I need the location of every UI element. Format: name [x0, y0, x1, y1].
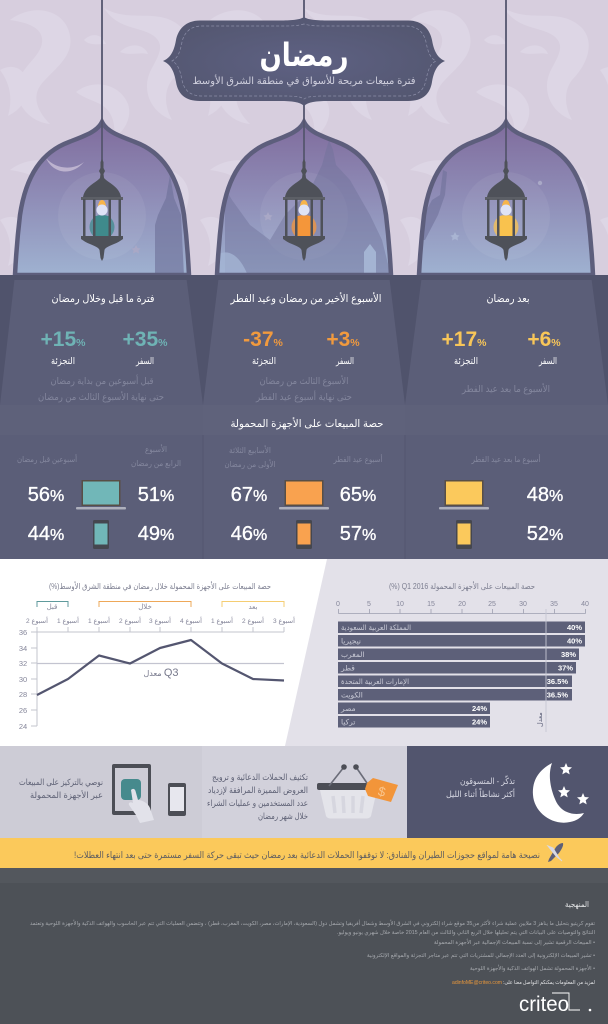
line chart: mobile share during Ramadan — [19, 581, 295, 731]
stats section background — [0, 275, 608, 560]
device share percentages: 48% — [527, 484, 563, 506]
callout: tip for travel sites — [0, 838, 608, 868]
column headings: الأسبوع الأخير من رمضان وعيد الفطر — [230, 292, 382, 305]
value labels: 24% — [472, 704, 487, 713]
axis labels: 15 — [427, 601, 435, 608]
icon: phone yellow — [456, 520, 472, 549]
country labels: مصر — [340, 704, 356, 713]
stats: pre and during Ramadan: السفر — [135, 356, 154, 367]
arch: last week of Ramadan and Eid scene — [217, 120, 391, 276]
text: العروض المميزة المرافقة لإزدياد — [208, 785, 308, 796]
lantern: yellow — [485, 159, 527, 261]
axis labels: 30 — [519, 601, 527, 608]
average line — [545, 609, 547, 732]
column headings: بعد رمضان — [486, 293, 530, 305]
text — [19, 777, 103, 800]
device share percentages: 67% — [231, 484, 267, 506]
stats: pre and during Ramadan: التجزئة — [51, 356, 75, 367]
week labels: أسبوع 1 — [211, 616, 233, 625]
bar chart axis — [338, 609, 586, 614]
week labels: أسبوع 2 — [119, 616, 141, 625]
data line — [37, 640, 284, 695]
stats: last week and Eid: +3% — [326, 328, 360, 351]
value labels: 24% — [472, 718, 487, 726]
stats: last week and Eid: -37% — [243, 328, 284, 351]
lantern: teal — [81, 159, 123, 261]
lantern cords — [102, 0, 506, 162]
period labels: أسبوع عيد الفطر — [333, 454, 382, 464]
text: تذكّر - المتسوقون — [460, 775, 516, 786]
week labels: أسبوع 3 — [149, 616, 171, 625]
bracket labels — [47, 604, 258, 611]
methodology text — [30, 919, 595, 972]
device share percentages: 65% — [340, 484, 376, 506]
icon: shopping basket with price tag — [317, 764, 398, 818]
period labels: الرابع من رمضان — [131, 459, 181, 468]
week labels: أسبوع 1 — [57, 616, 79, 625]
bracket labels: قبل — [47, 604, 57, 611]
value labels: 38% — [561, 650, 576, 659]
stats: pre and during Ramadan: حتى نهاية الأسبوع الثالث من رمضان — [38, 391, 164, 403]
methodology heading: المنهجية — [565, 900, 589, 909]
column headings: فترة ما قبل وخلال رمضان — [52, 293, 154, 305]
period labels: الأولى من رمضان — [224, 459, 276, 469]
bars — [338, 622, 585, 728]
device share percentages: 44% — [28, 523, 64, 545]
country labels — [340, 623, 411, 726]
period labels: أسبوعين قبل رمضان — [17, 454, 77, 464]
title banner — [163, 17, 445, 106]
text — [207, 772, 309, 821]
Q3 average line — [37, 662, 284, 664]
arch: after Ramadan scene — [419, 120, 593, 276]
country labels: المغرب — [341, 650, 365, 659]
header background with arabesque pattern — [0, 0, 608, 276]
week labels: أسبوع 4 — [180, 616, 202, 625]
device share percentages: 51% — [138, 484, 174, 506]
y axis labels: 32 — [19, 659, 27, 668]
text — [446, 775, 516, 799]
methodology text: • تشير المبيعات الإلكترونية إلى العدد الإجمالي للمشتريات التي تتم عبر متاجر التجزئة والمواقع الإلكترونية — [367, 952, 595, 959]
stats: pre and during Ramadan — [38, 328, 168, 403]
bar chart title: حصة المبيعات على الأجهزة المحمولة Q1 2016 (%) — [389, 581, 535, 591]
device share percentages: 46% — [231, 523, 267, 545]
country labels: تركيا — [341, 718, 355, 726]
icon: phone orange — [296, 520, 312, 549]
arch: pre and during Ramadan scene — [15, 120, 189, 276]
text: تكثيف الحملات الدعائية و ترويج — [212, 772, 309, 782]
callout text: نصيحة هامة لمواقع حجوزات الطيران والفنادق: لا توقفوا الحملات الدعائية بعد رمضان حيث تبقى حركة السفر مستمرة حتى بعد انتهاء العطلات! — [74, 850, 540, 860]
stats: last week and Eid: حتى نهاية أسبوع عيد الفطر — [255, 390, 352, 403]
week labels: أسبوع 1 — [88, 616, 110, 625]
country labels: قطر — [340, 664, 355, 672]
panel: night shoppers — [446, 763, 589, 823]
week labels: أسبوع 2 — [242, 616, 264, 625]
line chart title: حصة المبيعات على الأجهزة المحمولة خلال رمضان في منطقة الشرق الأوسط(%) — [49, 581, 271, 591]
stats: last week and Eid: التجزئة — [252, 356, 276, 367]
period brackets — [37, 602, 284, 607]
device share percentages — [28, 484, 563, 545]
axis labels: 35 — [550, 601, 558, 608]
axis labels: 10 — [396, 601, 404, 608]
text: خلال شهر رمضان — [258, 811, 308, 821]
stats: after Ramadan: +6% — [527, 328, 561, 351]
icon: laptop yellow — [439, 480, 489, 510]
icon: airplane — [548, 843, 563, 862]
heading: رمضان — [260, 37, 348, 74]
value labels: 40% — [567, 636, 582, 646]
icon: shopping basket with price tag: $ — [377, 783, 388, 800]
stats: after Ramadan: السفر — [538, 356, 557, 367]
week labels: أسبوع 3 — [273, 616, 295, 625]
axis labels: 40 — [581, 601, 589, 608]
bracket labels: بعد — [248, 604, 258, 611]
text: نوصي بالتركيز على المبيعات — [19, 777, 103, 787]
y axis labels: 24 — [19, 722, 27, 731]
axis labels: 0 — [336, 601, 340, 608]
stats: pre and during Ramadan: +35% — [123, 328, 168, 351]
y axis labels: 34 — [19, 644, 27, 653]
stats: after Ramadan: الأسبوع ما بعد عيد الفطر — [461, 383, 550, 395]
y axis labels: 28 — [19, 690, 27, 699]
axis labels: 20 — [458, 601, 466, 608]
panel: methodology footer — [0, 868, 608, 1024]
icon: phone teal — [93, 520, 109, 549]
icon: laptop orange — [279, 480, 329, 510]
stats: pre and during Ramadan: +15% — [41, 328, 86, 351]
criteo logo: criteo — [519, 993, 569, 1016]
panel: mobile recommendation — [19, 764, 186, 823]
lantern: orange — [283, 159, 325, 261]
value labels — [472, 623, 582, 726]
methodology text: تقوم كريتيو بتحليل ما يناهز 3 ملايين عملية شراء لأكثر من35 موقع شراء إلكتروني في الشرق الأوسط وشمال أفريقيا وتشمل دول (السعودية، الإمارات، مصر، الكويت، المغرب، قطر) ، وتتضمن العمليات التي تتم عبر الحاسوب والهواتف الذكية والأجهزة اللوحية وتعتمد — [30, 919, 595, 927]
axis labels — [336, 601, 589, 608]
panel: campaigns recommendation — [207, 764, 398, 821]
text: أكثر نشاطاً أثناء الليل — [446, 787, 515, 799]
icon: tablet and phone with hand — [112, 764, 186, 823]
period labels: الأسبوع — [145, 444, 167, 454]
recommendation row background — [0, 746, 608, 838]
y axis labels: 36 — [19, 628, 27, 637]
week labels — [26, 616, 295, 625]
country labels: الكويت — [341, 690, 363, 700]
axes — [31, 627, 284, 726]
axis labels: 5 — [367, 601, 371, 608]
axis labels: 25 — [488, 601, 496, 608]
week labels: أسبوع 2 — [26, 616, 48, 625]
charts background — [0, 559, 608, 746]
period labels: الأسابيع الثلاثة — [229, 445, 271, 455]
contact line: لمزيد من المعلومات يمكنكم التواصل معنا على: — [503, 979, 595, 986]
stats: after Ramadan — [442, 328, 561, 395]
y axis labels: 26 — [19, 706, 27, 715]
device share percentages: 52% — [527, 523, 563, 545]
methodology text: • المبيعات الرقمية تشير إلى نسبة المبيعات الإجمالية عبر الأجهزة المحمولة — [434, 938, 595, 946]
icon: crescent moon and stars — [533, 763, 589, 823]
stats: after Ramadan: +17% — [442, 328, 487, 351]
Q3 average label: Q3 معدل — [143, 667, 179, 679]
contact line — [452, 979, 595, 986]
subheading: فترة مبيعات مربحة للأسواق في منطقة الشرق الأوسط — [192, 74, 416, 87]
text: عدد المستخدمين و عمليات الشراء — [207, 798, 308, 808]
methodology text: النتائج والتوصيات على البيانات التي يتم تحليلها خلال الربع الثاني والثالث من العام 2015 خاصة خلال شهري يونيو ويوليو. — [337, 930, 595, 936]
methodology text: • الأجهزة المحمولة تشمل الهواتف الذكية والأجهزة اللوحية — [470, 964, 595, 972]
stats: pre and during Ramadan: قبل أسبوعين من بداية رمضان — [50, 374, 154, 387]
value labels: 37% — [558, 664, 573, 672]
device share percentages: 49% — [138, 523, 174, 545]
country labels: نيجيريا — [341, 636, 361, 646]
stats: last week and Eid: السفر — [335, 356, 354, 367]
text: عبر الأجهزة المحمولة — [30, 790, 103, 800]
bracket labels: خلال — [138, 604, 152, 611]
icon: laptop teal — [76, 480, 126, 510]
period labels — [17, 444, 540, 469]
country labels: الإمارات العربية المتحدة — [341, 677, 409, 686]
period labels: أسبوع ما بعد عيد الفطر — [471, 454, 540, 464]
value labels: 40% — [567, 623, 582, 632]
y axis labels — [19, 628, 27, 731]
bar chart: mobile share by country — [336, 581, 589, 732]
device share percentages: 57% — [340, 523, 376, 545]
average label: معدل — [537, 712, 544, 727]
device share percentages: 56% — [28, 484, 64, 506]
value labels: 36.5% — [547, 677, 568, 686]
column headings — [52, 292, 530, 305]
value labels: 36.5% — [547, 690, 568, 700]
stats: last week and Eid — [243, 328, 360, 403]
stats: last week and Eid: الأسبوع الثالث من رمضان — [260, 375, 348, 387]
contact line: adinfoME@criteo.com — [452, 980, 502, 986]
country labels: المملكة العربية السعودية — [341, 623, 411, 632]
y axis labels: 30 — [19, 675, 27, 684]
stats: after Ramadan: التجزئة — [454, 356, 478, 367]
mobile share heading: حصة المبيعات على الأجهزة المحمولة — [230, 417, 384, 430]
